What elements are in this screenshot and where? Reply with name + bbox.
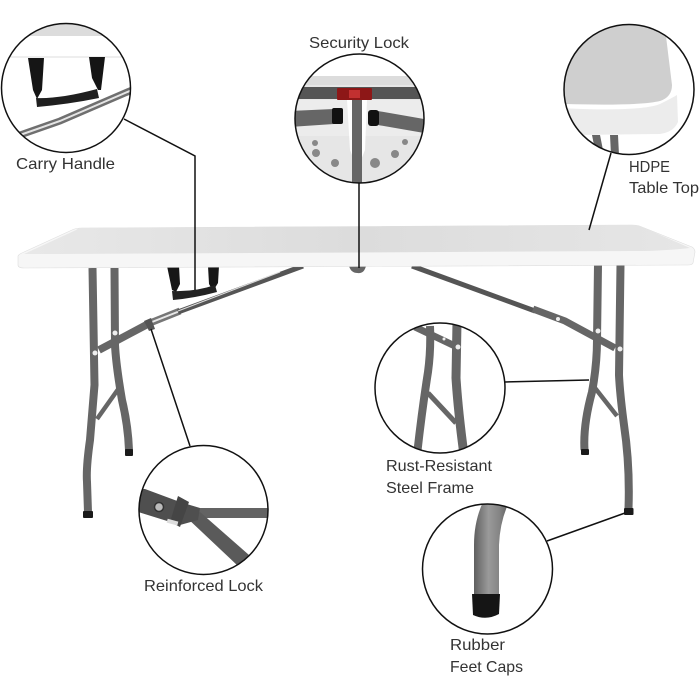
right table legs bbox=[412, 265, 629, 509]
label: security lock: Security Lock bbox=[309, 35, 410, 52]
callout line: reinforced lock bbox=[151, 329, 190, 446]
callout line: carry handle bbox=[124, 119, 195, 290]
label: rubber feet caps second line: Feet Caps bbox=[450, 659, 523, 676]
label: reinforced lock: Reinforced Lock bbox=[144, 578, 264, 595]
label: steel frame: Rust-Resistant bbox=[386, 458, 493, 475]
rubber feet bbox=[83, 449, 634, 518]
center lock bump bbox=[349, 266, 366, 273]
callout line: security lock bbox=[358, 183, 360, 268]
label: HDPE table top: HDPE bbox=[629, 159, 670, 176]
folding table bbox=[18, 225, 695, 518]
label: table top second line: Table Top bbox=[629, 180, 699, 197]
carry handle bbox=[167, 266, 219, 300]
label: carry handle: Carry Handle bbox=[16, 156, 115, 173]
label: steel frame second line: Steel Frame bbox=[386, 480, 474, 497]
left folding brace bbox=[92, 266, 303, 356]
panel: security lock bbox=[294, 53, 425, 184]
panel: reinforced lock bbox=[135, 446, 270, 574]
panel: HDPE table top bbox=[563, 24, 695, 156]
panel: steel frame bbox=[375, 322, 505, 455]
panel: carry handle bbox=[0, 20, 135, 160]
panel: rubber feet caps bbox=[422, 500, 552, 634]
callout line: table top bbox=[589, 153, 611, 230]
callout line: steel frame bbox=[505, 380, 589, 382]
left table legs bbox=[87, 268, 148, 512]
table top bbox=[18, 225, 695, 268]
callout line: rubber feet bbox=[547, 513, 625, 541]
label: rubber feet caps: Rubber bbox=[450, 637, 506, 654]
